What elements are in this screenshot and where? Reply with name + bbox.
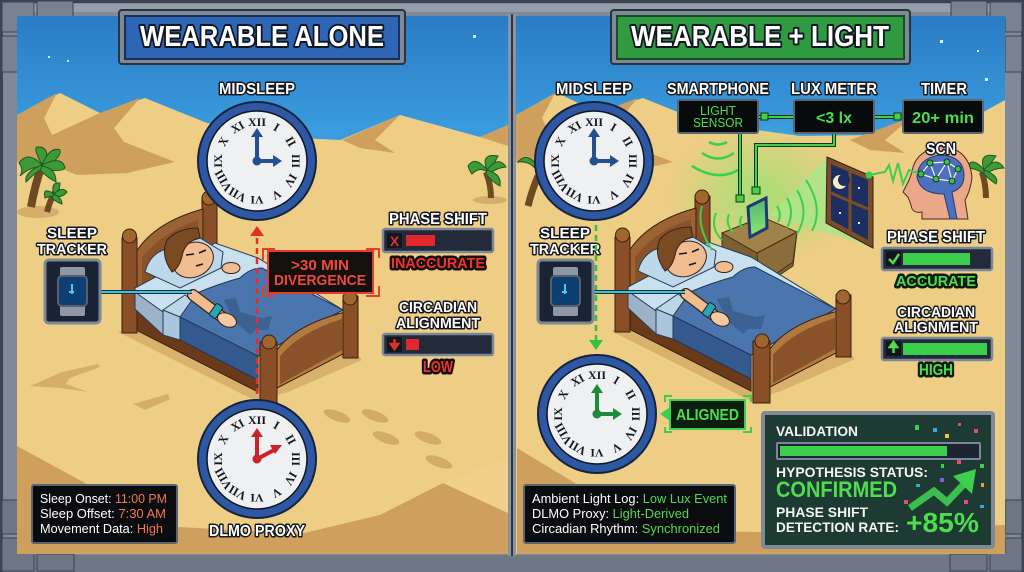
clock: midsleep left: VI: [250, 193, 264, 207]
info box: light data right: [524, 485, 735, 543]
title: wearable alone: WEARABLE ALONE: [140, 21, 384, 53]
label: sleep tracker right: [530, 225, 600, 258]
metric: phase shift left: INACCURATE: [391, 255, 485, 272]
sensor box: lux: <3 lx: [816, 110, 852, 127]
clock: dlmo proxy left: [198, 400, 316, 518]
bed with sleeper: right: [611, 190, 855, 403]
metric: circadian alignment left: [383, 299, 493, 376]
clock: midsleep right: VI: [587, 193, 601, 207]
clock: aligned dlmo right: III: [629, 407, 643, 421]
clock: dlmo proxy left: VII: [226, 482, 249, 503]
info box: sleep data left: Sleep Onset: 11:00 PM: [40, 491, 167, 506]
clock: aligned dlmo right: V: [609, 440, 624, 456]
label: sleep tracker left: [37, 225, 107, 258]
clock: midsleep left: IX: [211, 154, 225, 168]
clock: aligned dlmo right: XII: [588, 368, 606, 382]
label: lux meter: LUX METER: [791, 81, 877, 98]
dashed aligned arrow: [589, 225, 603, 350]
clock: midsleep right: II: [619, 134, 636, 149]
metric: phase shift right: [882, 229, 992, 290]
sensor box: timer: 20+ min: [912, 110, 974, 127]
clock: dlmo proxy left: IX: [211, 452, 225, 466]
text: detection rate label: [776, 504, 899, 535]
sensor box: light sensor: LIGHT: [700, 103, 736, 118]
clock: aligned dlmo right: VII: [566, 437, 589, 458]
metric: circadian alignment right: [882, 304, 992, 379]
palm trees: left panel: [17, 147, 507, 218]
clock: midsleep right: V: [606, 187, 621, 203]
clock: midsleep left: VIII: [211, 167, 235, 194]
clock: midsleep right: I: [608, 120, 619, 135]
metric: phase shift right: PHASE SHIFT: [887, 229, 985, 246]
confetti: [904, 423, 984, 508]
icon: brain and SCN with signal: [866, 141, 972, 219]
info box: sleep data left: Movement Data: High: [40, 521, 163, 536]
clock: midsleep left: XII: [248, 115, 266, 129]
label: sleep tracker left: SLEEP: [47, 225, 97, 242]
light cone and waves: [700, 157, 872, 250]
clock: midsleep left: III: [289, 154, 303, 168]
clock: dlmo proxy left: III: [289, 452, 303, 466]
clock: midsleep right: IV: [618, 171, 637, 190]
clock: midsleep left: IV: [281, 171, 300, 190]
sensor box: lux: [794, 100, 874, 133]
metric: phase shift left: PHASE SHIFT: [389, 211, 487, 228]
icon: rising arrow: [910, 469, 976, 508]
label: sleep tracker right: SLEEP: [540, 225, 590, 242]
clock: midsleep left: V: [269, 187, 284, 203]
label: midsleep left: MIDSLEEP: [219, 81, 295, 98]
clock: dlmo proxy left: XII: [248, 413, 266, 427]
metric: circadian alignment right: ALIGNMENT: [894, 319, 978, 336]
label: timer: TIMER: [921, 81, 967, 98]
callout: aligned: ALIGNED: [676, 407, 739, 424]
icon: brain and SCN with signal: SCN: [926, 141, 956, 158]
label: sleep tracker left: TRACKER: [37, 241, 107, 258]
callout: divergence: [263, 249, 379, 296]
clock: aligned dlmo right: IV: [621, 424, 640, 443]
clock: aligned dlmo right: X: [555, 387, 572, 402]
clock: aligned dlmo right: IX: [551, 407, 565, 421]
metric: circadian alignment right: HIGH: [919, 362, 953, 379]
clock: midsleep right: [535, 102, 653, 220]
clock: midsleep left: XI: [228, 118, 247, 137]
palm trees: right panel: [518, 155, 1004, 206]
info box: light data right: Circadian Rhythm: Synchronized: [532, 521, 720, 536]
clock: midsleep right: III: [626, 154, 640, 168]
panel: validation: [763, 413, 993, 547]
clock: aligned dlmo right: II: [622, 387, 639, 402]
clock: midsleep left: II: [282, 134, 299, 149]
clock: midsleep right: X: [552, 134, 569, 149]
nightstand: [722, 217, 797, 288]
heading: validation: VALIDATION: [776, 423, 858, 439]
callout: aligned: [660, 396, 751, 432]
title: wearable plus light: WEARABLE + LIGHT: [631, 21, 889, 53]
clock: dlmo proxy left: V: [269, 485, 284, 501]
icon: smartwatch left with link: [45, 260, 192, 323]
wifi arcs: [692, 142, 738, 175]
label: dlmo proxy: DLMO PROXY: [209, 523, 305, 540]
icon: smartphone: [748, 198, 767, 237]
clock: dlmo proxy left: XI: [228, 416, 247, 435]
text: detection rate label: PHASE SHIFT: [776, 504, 868, 520]
metric: phase shift right: ACCURATE: [896, 273, 976, 290]
metric: phase shift left: X: [390, 233, 400, 249]
sensor box: light sensor: SENSOR: [693, 115, 743, 130]
icon: smartwatch right with link: [538, 260, 685, 323]
metric: circadian alignment left: CIRCADIAN: [399, 299, 477, 316]
clock: midsleep left: I: [271, 120, 282, 135]
progress bar: [777, 443, 980, 459]
clock: midsleep right: VII: [563, 184, 586, 205]
value: plus 85 percent: +85%: [906, 507, 979, 538]
title: wearable plus light: [611, 10, 910, 64]
metric: circadian alignment left: ALIGNMENT: [396, 315, 480, 332]
clock: aligned dlmo right: [538, 355, 656, 473]
info box: light data right: Ambient Light Log: Low Lux Event: [532, 491, 727, 506]
clock: dlmo proxy left: II: [282, 432, 299, 447]
dashed divergence arrow: [250, 226, 264, 395]
metric: circadian alignment right: CIRCADIAN: [897, 304, 975, 321]
sensor box: timer: [903, 100, 983, 133]
clock: midsleep left: X: [215, 134, 232, 149]
clock: dlmo proxy left: VIII: [211, 465, 235, 492]
callout: divergence: >30 MIN: [291, 257, 349, 274]
text: hypothesis status: HYPOTHESIS STATUS:: [776, 464, 928, 480]
label: midsleep right: MIDSLEEP: [556, 81, 632, 98]
clock: aligned dlmo right: I: [611, 373, 622, 388]
info box: light data right: DLMO Proxy: Light-Derived: [532, 506, 689, 521]
clock: midsleep left: VII: [226, 184, 249, 205]
text: confirmed: CONFIRMED: [776, 477, 897, 502]
clock: midsleep right: IX: [548, 154, 562, 168]
clock: midsleep right: XII: [585, 115, 603, 129]
clock: dlmo proxy left: X: [215, 432, 232, 447]
metric: phase shift left: [383, 211, 493, 272]
panel: wearable alone background: [17, 16, 508, 560]
clock: dlmo proxy left: IV: [281, 469, 300, 488]
info box: sleep data left: Sleep Offset: 7:30 AM: [40, 506, 166, 521]
icon: night window: [826, 157, 873, 248]
clock: midsleep right: VIII: [548, 167, 572, 194]
label: sleep tracker right: TRACKER: [530, 241, 600, 258]
panel: wearable plus light background: [516, 16, 1005, 560]
clock: midsleep right: XI: [565, 118, 584, 137]
connectors: sensors: [736, 113, 903, 202]
sensor box: light sensor: [678, 100, 758, 133]
clock: dlmo proxy left: I: [271, 418, 282, 433]
title: wearable alone: [119, 10, 405, 64]
clock: aligned dlmo right: XI: [568, 371, 587, 390]
label: smartphone: SMARTPHONE: [667, 81, 769, 98]
metric: circadian alignment left: LOW: [423, 359, 454, 376]
callout: divergence: DIVERGENCE: [274, 272, 366, 289]
clock: dlmo proxy left: VI: [250, 491, 264, 505]
clock: aligned dlmo right: VI: [590, 446, 604, 460]
clock: aligned dlmo right: VIII: [551, 420, 575, 447]
info box: sleep data left: [32, 485, 177, 543]
bed with sleeper: left: [118, 191, 362, 404]
text: detection rate label: DETECTION RATE:: [776, 519, 899, 535]
clock: midsleep left: [198, 102, 316, 220]
